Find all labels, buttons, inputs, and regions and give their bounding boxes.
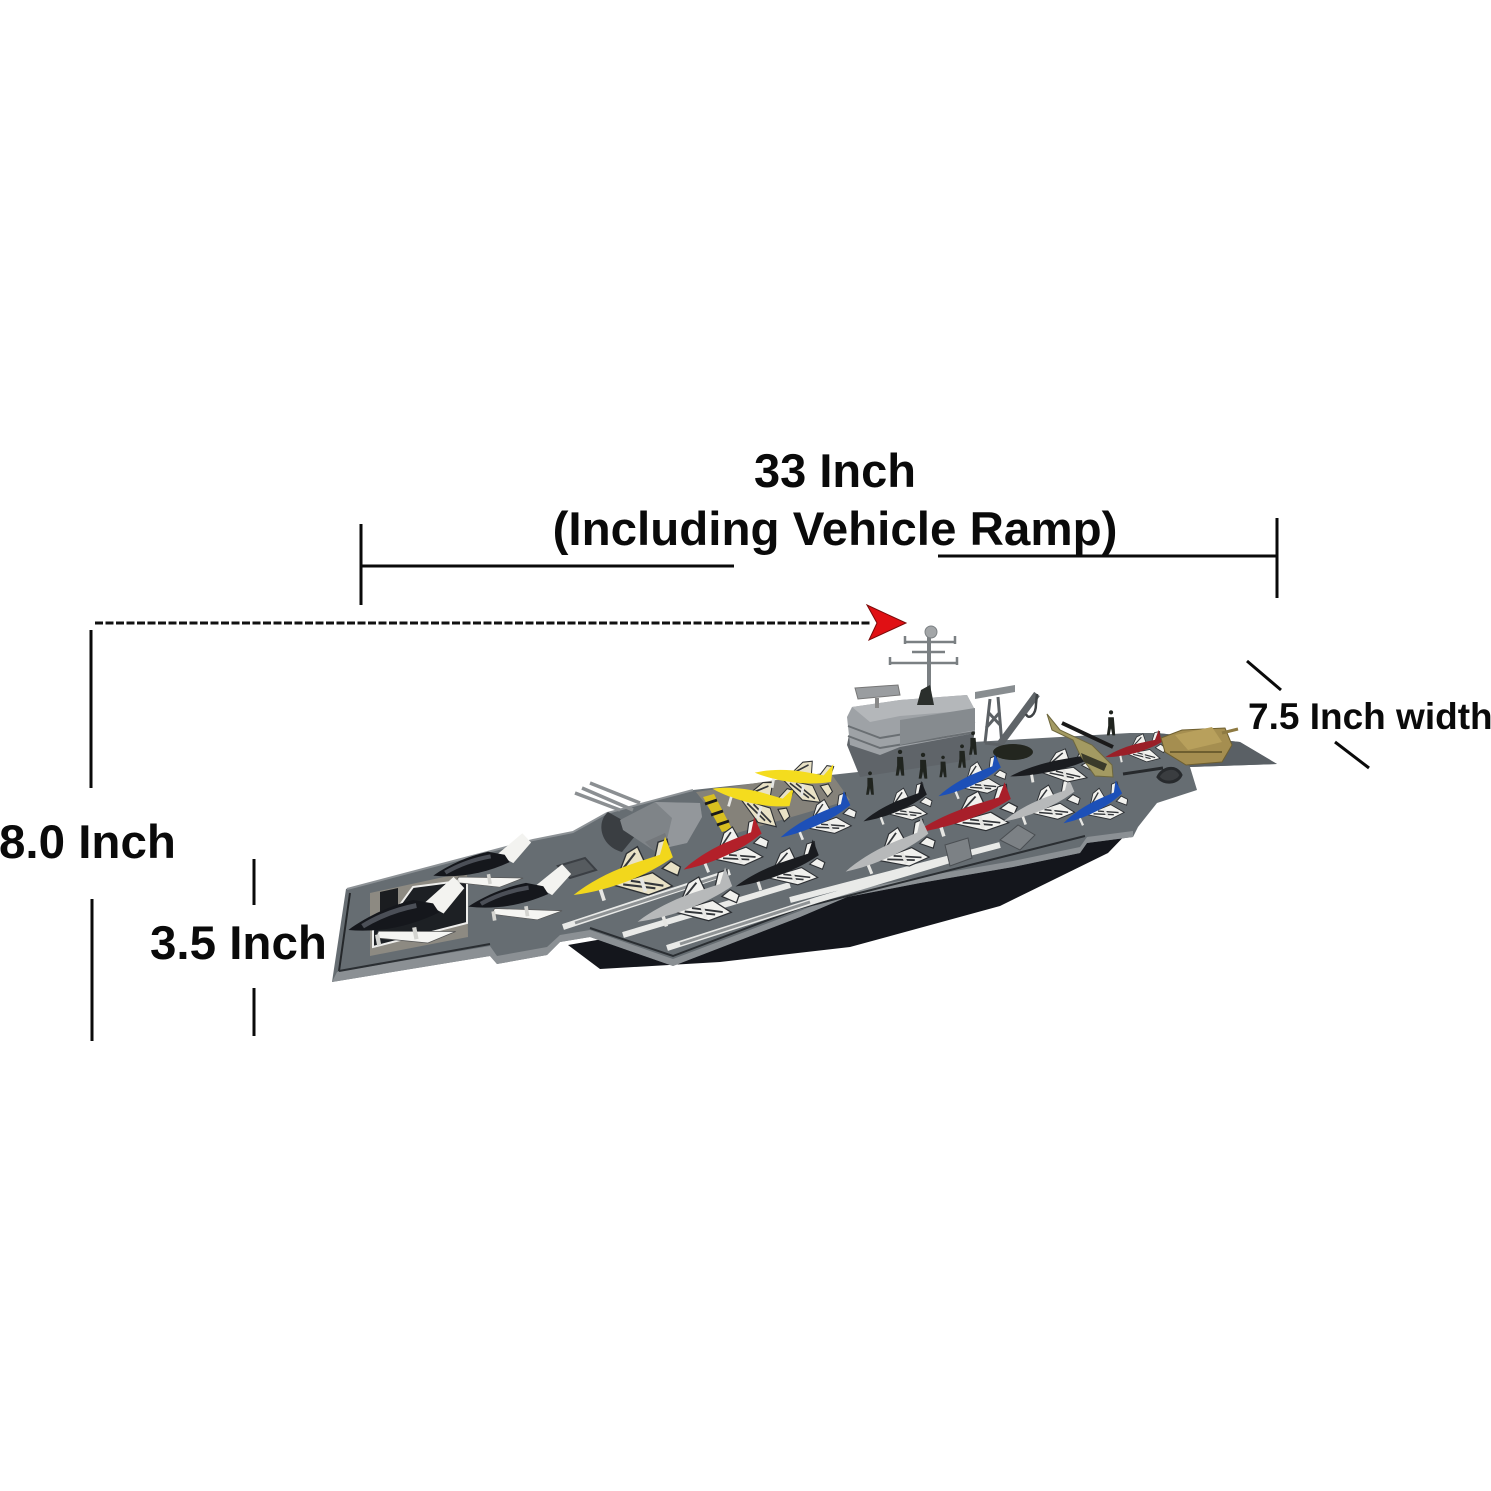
jet: black bow 3 — [464, 863, 577, 930]
radar mast — [890, 626, 957, 705]
heading: length label: 33 Inch — [754, 444, 916, 497]
dimension line: 7.5 inch width — [1247, 661, 1369, 768]
dimension line: 8.0 inch height — [91, 630, 92, 1041]
label: 3.5 inch: 3.5 Inch — [150, 917, 327, 970]
jet: yellow 1 — [565, 835, 686, 917]
deck hatch — [558, 858, 596, 878]
jet: blue 1 — [773, 789, 861, 853]
flight deck — [332, 733, 1277, 982]
label: 8.0 inch: 8.0 Inch — [0, 816, 176, 869]
heading: length label: (Including Vehicle Ramp) — [553, 503, 1117, 556]
anti-air guns — [945, 825, 1035, 866]
ramp edge — [1157, 733, 1277, 767]
dimension line: 3.5 inch height — [252, 859, 256, 1036]
command island — [847, 685, 975, 777]
jet: black 4 — [729, 838, 829, 903]
hazard landing pad — [696, 772, 850, 835]
sponson gun mount — [1123, 768, 1181, 782]
jet: black bow 2 — [342, 875, 473, 957]
crane — [993, 694, 1037, 760]
main gun turret — [575, 783, 702, 852]
jet: black 6 — [1007, 744, 1098, 792]
arrow: dashed height reference — [95, 605, 906, 640]
heading: length label — [553, 444, 1117, 556]
jet: red 2 — [909, 781, 1021, 851]
jet: gray 2 — [837, 816, 940, 889]
soldiers — [866, 710, 1115, 795]
bow markings — [370, 872, 468, 956]
jet: blue 2 — [932, 753, 1010, 811]
jet: blue 3 — [1056, 779, 1132, 837]
jet: black 5 — [857, 780, 936, 836]
tank — [1161, 727, 1238, 765]
ship hull — [568, 825, 1135, 969]
runway stripes — [563, 845, 1000, 948]
jet: red 1 — [675, 816, 773, 887]
radar tower — [975, 685, 1015, 745]
dimension line: 33 inch length — [361, 518, 1277, 605]
label: 7.5 inch width: 7.5 Inch width — [1248, 696, 1491, 737]
jet: gray 1 — [630, 866, 744, 942]
aircraft carrier toy — [332, 626, 1277, 982]
jet: yellow 3 — [751, 751, 837, 805]
jet: yellow 2 — [707, 766, 798, 830]
jet: gray 3 — [997, 776, 1084, 837]
helicopter — [1047, 714, 1113, 777]
jet: red 3 — [1102, 729, 1168, 770]
jet: black bow 1 — [429, 832, 538, 898]
